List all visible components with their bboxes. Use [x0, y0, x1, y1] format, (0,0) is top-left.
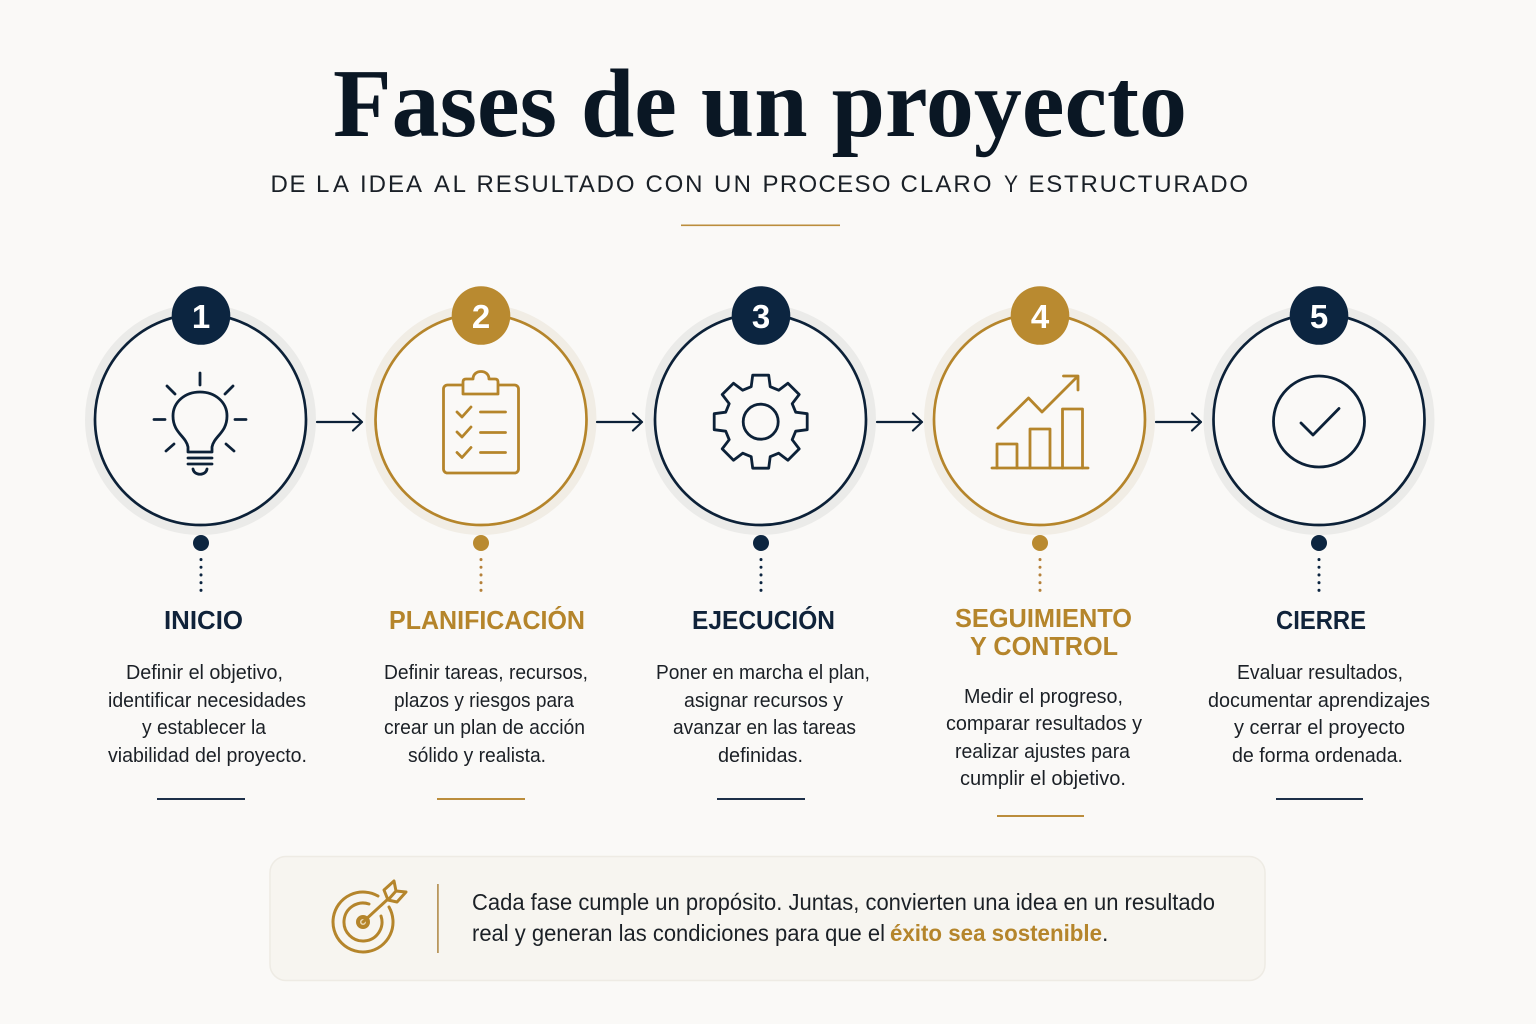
subtitle: PROCESO: [762, 171, 890, 198]
arrow 2 to 3: [597, 414, 642, 430]
text: inicio description: y establecer la: [142, 717, 267, 739]
subtitle: UN: [714, 171, 751, 198]
heading: seguimiento y control: SEGUIMIENTO: [955, 605, 1132, 633]
text: cierre description: [1208, 662, 1430, 767]
heading: seguimiento y control: [955, 605, 1132, 661]
text: planificacion description: Definir tareas, recursos,: [384, 662, 588, 684]
badge 2: [452, 286, 510, 345]
text: planificacion description: crear un plan de acción: [384, 717, 585, 739]
text: seguimiento description: Medir el progreso,: [964, 686, 1123, 708]
text: inicio description: [108, 662, 307, 767]
subtitle: IDEA: [360, 171, 422, 198]
subtitle: CON: [646, 171, 702, 198]
text: ejecucion description: asignar recursos y: [684, 690, 843, 712]
heading: inicio: INICIO: [164, 607, 243, 635]
text: seguimiento description: cumplir el objetivo.: [960, 768, 1126, 790]
callout panel: [270, 856, 1265, 980]
text: cierre description: y cerrar el proyecto: [1234, 717, 1405, 739]
marker 4: [1032, 535, 1048, 591]
subtitle: LA: [316, 171, 349, 198]
text: planificacion description: plazos y riesgos para: [394, 690, 575, 712]
text: inicio description: Definir el objetivo,: [126, 662, 283, 684]
text: ejecucion description: Poner en marcha el plan,: [656, 662, 870, 684]
callout text: éxito sea sostenible: [890, 920, 1102, 946]
text: ejecucion description: definidas.: [718, 745, 803, 767]
phase 2 ring: planificacion: [370, 286, 592, 530]
badge 3: [732, 286, 790, 345]
callout text: .: [1102, 920, 1108, 946]
text: cierre description: documentar aprendizajes: [1208, 690, 1430, 712]
text: cierre description: Evaluar resultados,: [1237, 662, 1403, 684]
badge 4: [1011, 286, 1069, 345]
badge 4: 4: [1031, 298, 1050, 335]
badge 3: 3: [752, 298, 770, 335]
marker 2: [473, 535, 489, 591]
arrow 3 to 4: [877, 414, 922, 430]
subtitle: ESTRUCTURADO: [1028, 171, 1248, 198]
callout text: Cada fase cumple un propósito. Juntas, convierten una idea en un resultado: [472, 889, 1215, 915]
text: planificacion description: [384, 662, 588, 767]
title: Fases de un proyecto: [333, 50, 1187, 157]
phase 4 ring: seguimiento y control: [929, 286, 1150, 530]
phase 1 ring: inicio: [90, 286, 311, 530]
text: cierre description: de forma ordenada.: [1232, 745, 1403, 767]
badge 1: [172, 286, 230, 345]
icon: growth chart: [992, 376, 1088, 468]
callout text: [472, 889, 1215, 946]
phase 3 ring: ejecucion: [650, 286, 871, 530]
icon: check circle: [1274, 376, 1364, 467]
marker 3: [753, 535, 769, 591]
phase 5 ring: cierre: [1208, 286, 1430, 530]
badge 5: 5: [1310, 298, 1328, 335]
heading: seguimiento y control: Y CONTROL: [970, 633, 1118, 661]
text: inicio description: viabilidad del proyecto.: [108, 745, 307, 767]
heading: cierre: CIERRE: [1276, 607, 1366, 635]
subtitle: CLARO: [900, 171, 992, 198]
icon: light bulb: [154, 373, 246, 474]
subtitle: DE: [270, 171, 306, 198]
subtitle: [270, 171, 1248, 198]
marker 1: [193, 535, 209, 591]
text: seguimiento description: realizar ajustes para: [955, 741, 1131, 763]
marker 5: [1311, 535, 1327, 591]
arrow 4 to 5: [1156, 414, 1201, 430]
text: inicio description: identificar necesidades: [108, 690, 306, 712]
text: seguimiento description: [946, 686, 1142, 790]
text: seguimiento description: comparar resultados y: [946, 713, 1142, 735]
text: planificacion description: sólido y realista.: [408, 745, 546, 767]
subtitle: RESULTADO: [476, 171, 634, 198]
text: ejecucion description: avanzar en las tareas: [673, 717, 856, 739]
badge 1: 1: [192, 298, 210, 335]
text: ejecucion description: [656, 662, 870, 767]
subtitle: Y: [1004, 171, 1018, 198]
icon: gear: [714, 375, 807, 468]
heading: ejecucion: EJECUCIÓN: [692, 605, 835, 635]
arrow 1 to 2: [317, 414, 362, 430]
icon: clipboard: [444, 372, 518, 473]
badge 2: 2: [472, 298, 490, 335]
subtitle: AL: [434, 171, 466, 198]
heading: planificacion: PLANIFICACIÓN: [389, 605, 585, 635]
badge 5: [1290, 286, 1348, 345]
icon: target with arrow: [333, 881, 406, 952]
callout text: real y generan las condiciones para que el: [472, 920, 885, 946]
